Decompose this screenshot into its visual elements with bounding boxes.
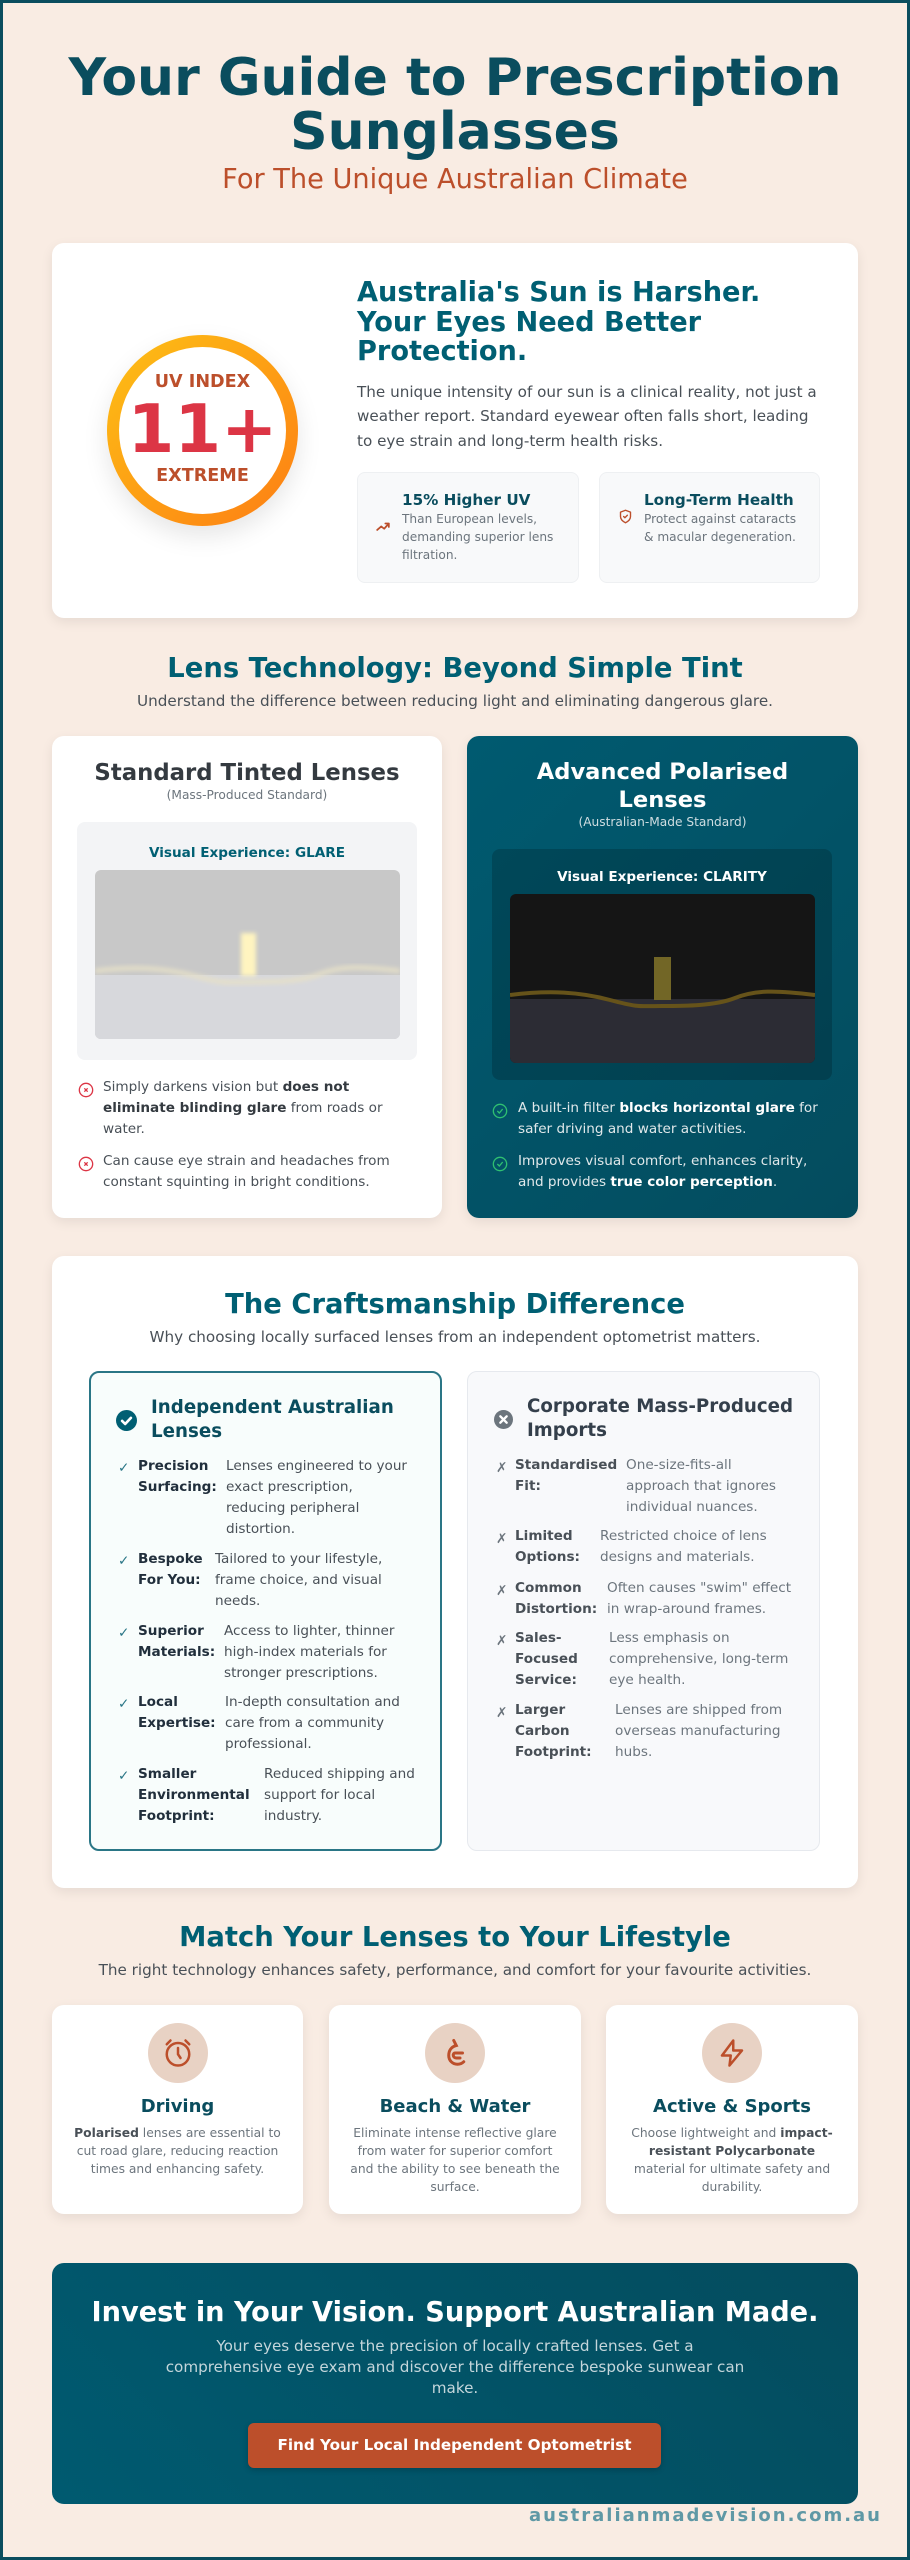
item: larger carbon footprint: [515, 1702, 782, 1760]
driving text: times and enhancing safety.: [91, 2162, 264, 2176]
heading: Advanced Polarised: [537, 759, 788, 785]
text: Focused: [515, 1651, 578, 1667]
text: Standardised: [515, 1457, 617, 1473]
active text: resistant Polycarbonate: [649, 2144, 815, 2158]
text: care from a community: [225, 1715, 384, 1731]
stat text: Long-Term Health: [644, 491, 794, 509]
text: industry.: [264, 1808, 322, 1824]
text: designs and materials.: [600, 1549, 755, 1565]
stat text: Than European levels,: [402, 512, 537, 526]
text: Footprint:: [515, 1744, 592, 1760]
panel: corporate imports: [467, 1371, 820, 1851]
beach text: [350, 2126, 560, 2194]
heading: corporate: Corporate Mass-Produced: [527, 1396, 793, 1417]
bullet: visual comfort: [492, 1153, 807, 1190]
text: Expertise:: [138, 1715, 216, 1731]
caption: (Mass-Produced Standard): [167, 788, 327, 802]
heading: independent: Lenses: [151, 1421, 222, 1442]
text: comprehensive eye exam and discover the difference bespoke sunwear can: [166, 2358, 744, 2376]
text: ✗: [496, 1583, 507, 1599]
UV level: EXTREME: [156, 466, 249, 486]
icon: shield check: [620, 510, 632, 524]
stat: 15% higher UV: [357, 472, 579, 583]
text: overseas manufacturing: [615, 1723, 780, 1739]
bullet: eye strain: constant squinting in bright conditions.: [103, 1174, 370, 1190]
label: Visual Experience: GLARE: [149, 845, 345, 861]
text: Limited: [515, 1528, 573, 1544]
text: high-index materials for: [224, 1644, 387, 1660]
text: approach that ignores: [626, 1478, 776, 1494]
panel: advanced polarised lenses: [467, 736, 858, 1218]
button: Find Your Local Independent Optometrist: [277, 2436, 632, 2454]
panel: active and sports: [606, 2005, 858, 2214]
text: eye health.: [609, 1672, 685, 1688]
text: Materials:: [138, 1644, 215, 1660]
text: individual nuances.: [626, 1499, 758, 1515]
icon: driving clock: [148, 2023, 208, 2083]
text: Larger: [515, 1702, 565, 1718]
subtitle: For The Unique Australian Climate: [222, 164, 688, 195]
panel: independent Australian lenses: [89, 1371, 442, 1851]
item: bespoke: [138, 1551, 382, 1609]
text: Often causes "swim" effect: [607, 1580, 791, 1596]
title: [68, 48, 842, 162]
UV value: 11+: [128, 390, 277, 468]
icon: check: [492, 1104, 508, 1118]
bullet: visual comfort: Improves visual comfort, enhances clarity,: [518, 1153, 807, 1169]
active text: Choose lightweight and impact-: [631, 2126, 833, 2140]
item: common distortion: [515, 1580, 791, 1617]
heading: independent: Independent Australian: [151, 1397, 394, 1418]
icon: cross circle: [494, 1410, 513, 1429]
section heading: craftsmanship: The Craftsmanship Difference: [225, 1289, 685, 1320]
UV index badge: [107, 335, 298, 526]
icon: check circle: [116, 1410, 137, 1431]
text: comprehensive, long-term: [609, 1651, 788, 1667]
text: in wrap-around frames.: [607, 1601, 766, 1617]
text: Your eyes deserve the precision of locally crafted lenses. Get a: [216, 2337, 694, 2355]
stat text: demanding superior lens: [402, 530, 553, 544]
body text: The unique intensity of our sun is a clinical reality, not just a: [357, 383, 817, 401]
section heading: lifestyle: Match Your Lenses to Your Lifestyle: [179, 1922, 731, 1953]
text: Tailored to your lifestyle,: [215, 1551, 382, 1567]
visual box: [77, 822, 417, 1060]
driving title: Driving: [141, 2096, 214, 2117]
text: Footprint:: [138, 1808, 215, 1824]
text: ✓: [118, 1553, 129, 1569]
icon: lightning: [702, 2023, 762, 2083]
text: reducing peripheral: [226, 1500, 359, 1516]
bullet: blocks horizontal glare: A built-in filter blocks horizontal glare for: [518, 1100, 818, 1116]
label: Visual Experience: CLARITY: [557, 869, 767, 885]
body text: [356, 383, 817, 450]
text: ✓: [118, 1460, 129, 1476]
text: Common: [515, 1580, 582, 1596]
bullet: eye strain: Can cause eye strain and headaches from: [103, 1153, 390, 1169]
text: For You:: [138, 1572, 201, 1588]
call to action panel: [52, 2263, 858, 2504]
text: Lenses engineered to your: [226, 1458, 407, 1474]
text: ✗: [496, 1460, 507, 1476]
section subheading: Understand the difference between reducing light and eliminating dangerous glare.: [137, 692, 773, 710]
heading: Lenses: [618, 787, 707, 813]
text: ✗: [496, 1633, 507, 1649]
text: One-size-fits-all: [626, 1457, 732, 1473]
heading: [536, 759, 788, 813]
stat text: [402, 491, 553, 562]
bullet: does not eliminate glare: Simply darkens vision but does not: [103, 1079, 349, 1095]
stat: long-term health: [599, 472, 820, 583]
icon: cross: [78, 1082, 94, 1098]
text: Smaller: [138, 1766, 196, 1782]
bullet: does not eliminate glare: eliminate blinding glare from roads or: [103, 1100, 383, 1116]
clarity illustration: [510, 894, 815, 1063]
text: exact prescription,: [226, 1479, 353, 1495]
heading: Standard Tinted Lenses: [94, 760, 400, 786]
text: In-depth consultation and: [225, 1694, 400, 1710]
panel: standard tinted lenses: [52, 736, 442, 1218]
panel: driving: [52, 2005, 303, 2214]
text: ✓: [118, 1768, 129, 1784]
text: Service:: [515, 1672, 577, 1688]
bullet: visual comfort: and provides true color perception.: [518, 1174, 777, 1190]
heading: Protection.: [357, 336, 527, 367]
text: Carbon: [515, 1723, 570, 1739]
icon: waves: [425, 2023, 485, 2083]
bullet: blocks horizontal glare: safer driving and water activities.: [518, 1121, 746, 1137]
panel: craftsmanship difference: [52, 1256, 858, 1888]
text: ✗: [496, 1531, 507, 1547]
text: distortion.: [226, 1521, 295, 1537]
beach text: and the ability to see beneath the: [350, 2162, 560, 2176]
text: Sales-: [515, 1630, 562, 1646]
driving text: Polarised lenses are essential to: [74, 2126, 281, 2140]
heading: Your Eyes Need Better: [357, 307, 701, 338]
text: ✓: [118, 1625, 129, 1641]
text: stronger prescriptions.: [224, 1665, 378, 1681]
text: Reduced shipping and: [264, 1766, 415, 1782]
item: local expertise: [138, 1694, 400, 1752]
heading: corporate: Imports: [527, 1420, 607, 1441]
section heading: lens technology: Lens Technology: Beyond Simple Tint: [167, 653, 743, 684]
bullet: does not eliminate glare: [78, 1079, 383, 1137]
bullet: does not eliminate glare: water.: [103, 1121, 145, 1137]
heading: Invest in Your Vision. Support Australian Made.: [92, 2297, 818, 2328]
beach text: surface.: [430, 2180, 480, 2194]
icon: cross: [78, 1156, 94, 1172]
beach text: Eliminate intense reflective glare: [353, 2126, 557, 2140]
text: Fit:: [515, 1478, 541, 1494]
text: Options:: [515, 1549, 580, 1565]
item: sales-focused service: [515, 1630, 788, 1688]
text: Restricted choice of lens: [600, 1528, 767, 1544]
heading: independent: [151, 1397, 394, 1442]
text: Precision: [138, 1458, 208, 1474]
item: standardised fit: [515, 1457, 776, 1515]
visual box: [492, 849, 832, 1080]
bullet: blocks horizontal glare: [492, 1100, 818, 1137]
text: Distortion:: [515, 1601, 597, 1617]
bullet: eye strain: [78, 1153, 390, 1190]
text: Superior: [138, 1623, 204, 1639]
panel: UV section: [52, 243, 858, 618]
button: [248, 2423, 661, 2468]
beach title: Beach & Water: [380, 2096, 530, 2117]
heading: corporate: [527, 1396, 793, 1441]
active text: durability.: [702, 2180, 762, 2194]
stat text: [644, 491, 796, 544]
text: hubs.: [615, 1744, 652, 1760]
item: smaller footprint: [138, 1766, 415, 1824]
text: frame choice, and visual: [215, 1572, 382, 1588]
text: support for local: [264, 1787, 375, 1803]
section subheading: Why choosing locally surfaced lenses from an independent optometrist matters.: [150, 1328, 760, 1346]
beach text: from water for superior comfort: [358, 2144, 552, 2158]
drawback list: [496, 1457, 791, 1760]
text: Less emphasis on: [609, 1630, 730, 1646]
icon: trending up: [376, 522, 390, 531]
glare illustration: [95, 870, 400, 1039]
benefit list: [118, 1458, 415, 1824]
driving text: cut road glare, reducing reaction: [77, 2144, 278, 2158]
UV index label: UV INDEX: [155, 372, 250, 392]
text: Lenses are shipped from: [615, 1702, 782, 1718]
text: Local: [138, 1694, 178, 1710]
heading: Australia's Sun is Harsher.: [357, 277, 760, 308]
active text: [631, 2126, 833, 2194]
text: Surfacing:: [138, 1479, 217, 1495]
active text: material for ultimate safety and: [634, 2162, 830, 2176]
text: ✓: [118, 1696, 129, 1712]
driving text: [74, 2126, 281, 2176]
panel: beach and water: [329, 2005, 581, 2214]
item: precision surfacing: [138, 1458, 407, 1537]
body text: to eye strain and long-term health risks.: [357, 432, 663, 450]
body text: weather report. Standard eyewear often falls short, leading: [357, 407, 808, 425]
text: make.: [432, 2379, 478, 2397]
stat text: Protect against cataracts: [644, 512, 796, 526]
section subheading: The right technology enhances safety, performance, and comfort for your favourite activities.: [99, 1961, 811, 1979]
footer URL: australianmadevision.com.au: [529, 2505, 882, 2526]
active title: Active & Sports: [653, 2096, 811, 2117]
text: [166, 2337, 744, 2397]
item: superior materials: [138, 1623, 394, 1681]
stat text: & macular degeneration.: [644, 530, 796, 544]
icon: check: [492, 1156, 508, 1172]
heading: [356, 277, 760, 367]
title: Your Guide to Prescription: [68, 48, 842, 108]
text: Access to lighter, thinner: [224, 1623, 394, 1639]
text: Bespoke: [138, 1551, 203, 1567]
item: limited options: [515, 1528, 767, 1565]
stat text: 15% Higher UV: [402, 491, 530, 509]
text: Environmental: [138, 1787, 250, 1803]
title: Sunglasses: [290, 102, 620, 162]
caption: (Australian-Made Standard): [578, 815, 747, 829]
text: needs.: [215, 1593, 260, 1609]
text: professional.: [225, 1736, 312, 1752]
stat text: filtration.: [402, 548, 457, 562]
text: ✗: [496, 1705, 507, 1721]
